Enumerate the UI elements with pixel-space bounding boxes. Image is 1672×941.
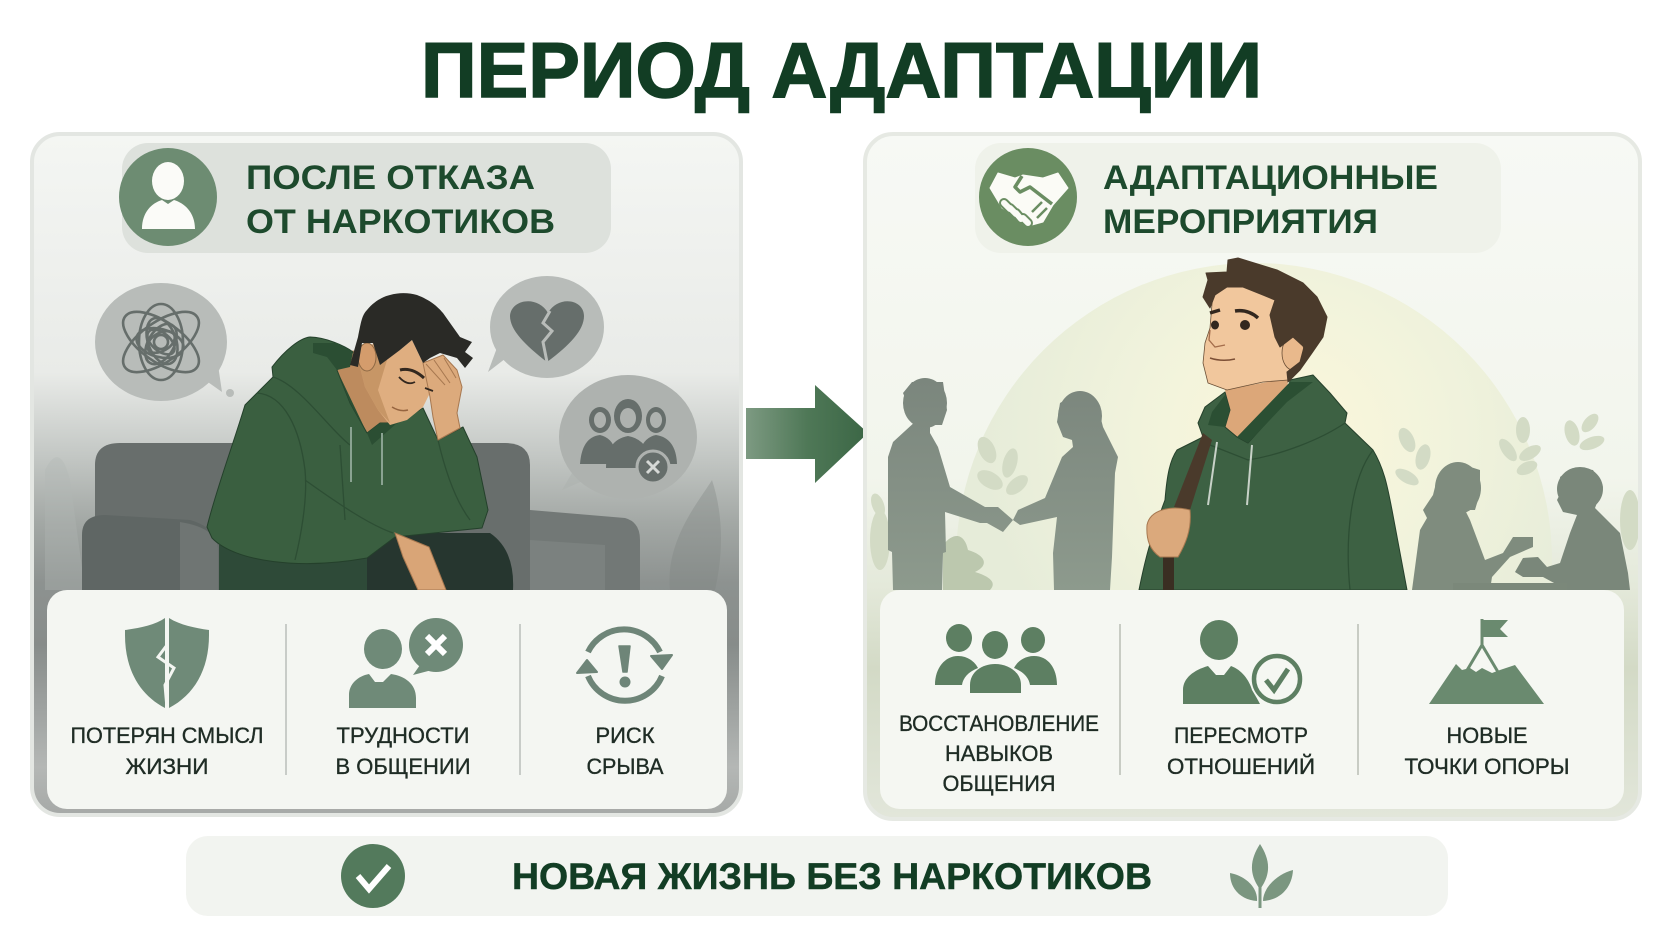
panel: after quitting drugs (32, 134, 741, 815)
silhouette: seated woman (1412, 462, 1533, 590)
label (899, 711, 1099, 796)
label: ТОЧКИ ОПОРЫ (1404, 754, 1570, 779)
bottom banner (186, 836, 1448, 916)
icon: person (119, 148, 217, 246)
icon: group (935, 624, 1057, 693)
icon: check (341, 844, 405, 908)
label: СРЫВА (586, 754, 664, 779)
thought bubble: tangled thoughts (95, 283, 234, 401)
label (336, 723, 470, 779)
sun dome (956, 263, 1552, 590)
speech bubble: broken heart (488, 276, 604, 378)
header pill left: ОТ НАРКОТИКОВ (246, 203, 555, 241)
header pill left (119, 143, 611, 253)
illustration: sad man on sofa (45, 293, 721, 590)
silhouette: handshake woman (1013, 391, 1118, 590)
label (70, 723, 264, 779)
panel: adaptation activities (865, 134, 1640, 819)
header text: АДАПТАЦИОННЫЕ (1103, 159, 1438, 197)
bubble: isolated from people (559, 375, 697, 499)
arrow (746, 385, 868, 483)
header pill right (975, 143, 1501, 253)
label (586, 723, 664, 779)
silhouette: handshake man (888, 378, 1013, 590)
icon: sprout (1230, 844, 1293, 908)
label: ВОССТАНОВЛЕНИЕ (899, 711, 1099, 736)
card: activities (880, 590, 1624, 809)
label: РИСК (596, 723, 655, 748)
silhouette: seated man (1515, 467, 1630, 590)
icon: handshake (979, 148, 1077, 246)
label: ТРУДНОСТИ (336, 723, 470, 748)
card: consequences (47, 590, 727, 809)
label: ПЕРЕСМОТР (1174, 723, 1308, 748)
plants (868, 411, 1640, 570)
illustration: hopeful young man (1139, 258, 1407, 591)
icon: person with check (1183, 620, 1300, 704)
icon: cracked shield (125, 618, 209, 708)
label: ОБЩЕНИЯ (942, 771, 1056, 796)
header text: ПОСЛЕ ОТКАЗА (246, 159, 535, 197)
icon: communication difficulties (349, 618, 463, 708)
label: ПОТЕРЯН СМЫСЛ (70, 723, 264, 748)
label (1404, 723, 1570, 779)
icon: relapse risk (577, 629, 672, 701)
label: ЖИЗНИ (126, 754, 208, 779)
title: ПЕРИОД АДАПТАЦИИ (421, 26, 1262, 114)
banner text: НОВАЯ ЖИЗНЬ БЕЗ НАРКОТИКОВ (512, 856, 1152, 897)
icon: mountain with flag (1429, 619, 1544, 704)
label: НОВЫЕ (1446, 723, 1528, 748)
label: ОТНОШЕНИЙ (1167, 754, 1315, 779)
label: В ОБЩЕНИИ (336, 754, 470, 779)
label: НАВЫКОВ (945, 741, 1053, 766)
header pill right: МЕРОПРИЯТИЯ (1103, 203, 1378, 241)
label (1167, 723, 1315, 779)
